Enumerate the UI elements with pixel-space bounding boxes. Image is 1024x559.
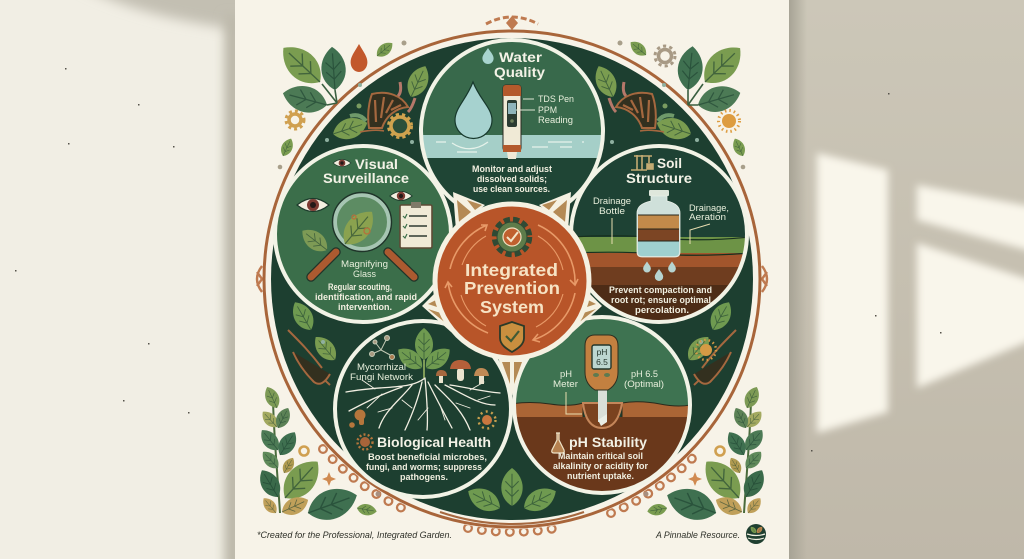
labels: bottle and aeration: Aeration — [689, 212, 726, 222]
labels: bottle and aeration — [593, 196, 729, 222]
labels: bottle and aeration: Drainage — [593, 196, 631, 206]
icon: sun top right — [718, 110, 740, 132]
footer note right: A Pinnable Resource. — [655, 529, 740, 540]
text: water quality body: Monitor and adjust — [472, 164, 552, 174]
heading: water quality: Water — [499, 49, 543, 65]
heading: visual surveillance — [323, 156, 409, 186]
text: pH stability body — [553, 451, 648, 481]
panel: water quality — [419, 38, 605, 204]
icon: gear with check — [495, 220, 529, 254]
text: pH stability body: Maintain critical soil — [558, 451, 643, 461]
icon: pH meter — [585, 335, 618, 426]
icon: pH meter: pH — [597, 347, 607, 357]
heading: soil structure: Soil — [657, 155, 682, 171]
text: visual surveillance body — [315, 282, 417, 312]
decor: upper left leaves and fan — [325, 62, 434, 144]
icon: footer logo — [746, 524, 766, 544]
text: soil structure body: root rot; ensure optimal — [611, 295, 711, 305]
icon: TDS pen — [503, 85, 521, 159]
icon: right eye — [390, 191, 412, 201]
heading: water quality — [494, 49, 545, 80]
text: soil structure body: Prevent compaction and — [609, 285, 712, 295]
plant: bottom right — [644, 384, 770, 527]
heading: integrated prevention system — [464, 260, 560, 317]
labels: pH meter and optimal — [553, 369, 664, 389]
icon: pH meter: 6.5 — [596, 357, 608, 367]
text: water quality body — [472, 164, 552, 194]
text: soil structure body: percolation. — [635, 305, 689, 315]
icon: leaf with spots — [297, 224, 332, 257]
panel: visual surveillance — [275, 146, 451, 322]
icon: clipboard checklist — [400, 202, 432, 248]
small decorations: top right — [618, 38, 748, 169]
icon: large water drop — [455, 82, 492, 138]
icon: small header eye — [333, 159, 351, 167]
icon: small water drop — [482, 48, 494, 64]
label: mycorrhizal fungi network — [350, 362, 414, 382]
heading: integrated prevention system: Prevention — [464, 278, 560, 298]
icon: drainage bottle — [637, 190, 680, 281]
plant: bottom left — [254, 384, 380, 527]
cycle arrows — [445, 225, 578, 342]
icon: plant — [393, 328, 455, 378]
heading: visual surveillance: Surveillance — [323, 170, 409, 186]
labels: TDS pen reading: TDS Pen — [538, 94, 574, 104]
decor: lower left leaves — [287, 298, 344, 385]
icon: microbe — [478, 412, 496, 428]
icon: mushrooms — [436, 360, 489, 384]
panel: soil structure — [565, 140, 755, 325]
text: soil structure body — [609, 285, 712, 315]
icon: crane — [631, 155, 653, 170]
panel: central integrated prevention system — [435, 204, 589, 358]
text: biological health body — [366, 452, 487, 482]
panel layered background — [516, 319, 688, 491]
heading: visual surveillance: Visual — [355, 156, 398, 172]
labels: pH meter and optimal: Meter — [553, 379, 578, 389]
icon: roots — [346, 378, 500, 430]
text: visual surveillance body: intervention. — [338, 302, 392, 312]
icon: orange fungus blob — [349, 410, 366, 428]
decor: bottom centre leaves — [440, 468, 584, 524]
icon: fungi network — [370, 336, 394, 360]
heading: soil structure: Structure — [626, 170, 692, 186]
panel soil background layers — [578, 235, 745, 320]
decor: lower right leaves — [680, 298, 737, 385]
icon: flask — [552, 433, 564, 453]
text: biological health body: Boost beneficial microbes, — [368, 452, 487, 462]
decor: upper right leaves and fan — [590, 62, 699, 144]
label: mycorrhizal fungi network: Fungi Network — [350, 372, 414, 382]
dark green disc — [271, 38, 753, 520]
heading: soil structure — [626, 155, 692, 186]
pointer line — [566, 392, 582, 414]
heading: integrated prevention system: System — [480, 297, 544, 317]
outer copper ring — [264, 31, 760, 527]
footer note left: *Created for the Professional, Integrated Garden. — [257, 529, 452, 540]
label: mycorrhizal fungi network: Mycorrhizal — [357, 362, 406, 372]
label: magnifying glass: Glass — [353, 269, 377, 279]
labels: pH meter and optimal: pH — [560, 369, 572, 379]
heading: biological health: Biological Health — [377, 434, 491, 450]
pointer lines — [612, 218, 710, 244]
labels: TDS pen reading: PPM — [538, 105, 557, 115]
labels: bottle and aeration: Drainage, — [689, 203, 729, 213]
poster sheet — [235, 0, 789, 559]
icon: gold gear in upper left — [388, 114, 412, 138]
text: biological health body: pathogens. — [400, 472, 448, 482]
panel background and water band — [423, 42, 601, 158]
icon: orange drop — [351, 44, 367, 72]
heading: water quality: Quality — [494, 64, 545, 80]
label: magnifying glass: Magnifying — [341, 259, 388, 269]
labels: pH meter and optimal: pH 6.5 — [631, 369, 658, 379]
labels: bottle and aeration: Bottle — [599, 206, 625, 216]
icon: left eye — [297, 198, 329, 212]
text: biological health body: fungi, and worms; suppress — [366, 462, 482, 472]
leaf cluster: top left — [274, 38, 347, 117]
text: water quality body: use clean sources. — [473, 184, 550, 194]
text: water quality body: dissolved solids; — [477, 174, 547, 184]
decorative cream spikes around centre — [422, 192, 602, 396]
icon: shield with check — [500, 322, 524, 352]
labels: TDS pen reading — [538, 94, 574, 125]
text: visual surveillance body: identification, and rapid — [315, 292, 417, 302]
heading: integrated prevention system: Integrated — [465, 260, 558, 280]
labels: pH meter and optimal: (Optimal) — [624, 379, 664, 389]
labels: TDS pen reading: Reading — [538, 115, 573, 125]
heading: pH stability: pH Stability — [569, 434, 647, 450]
leaf cluster: top right — [676, 38, 750, 117]
panel: biological health — [335, 321, 511, 497]
label lines — [516, 99, 535, 110]
decorative outer scalloped border — [257, 16, 767, 532]
label: magnifying glass — [341, 259, 388, 279]
panel: pH stability — [510, 315, 695, 502]
small decorations: top left — [278, 39, 406, 169]
text: pH stability body: alkalinity or acidity for — [553, 461, 648, 471]
text: visual surveillance body: Regular scouting, — [328, 282, 392, 292]
icon: sun microbe — [358, 434, 372, 450]
text: pH stability body: nutrient uptake. — [567, 471, 634, 481]
icon: magnifying glass — [311, 192, 414, 277]
icon: sun in lower right of disc — [696, 340, 716, 360]
